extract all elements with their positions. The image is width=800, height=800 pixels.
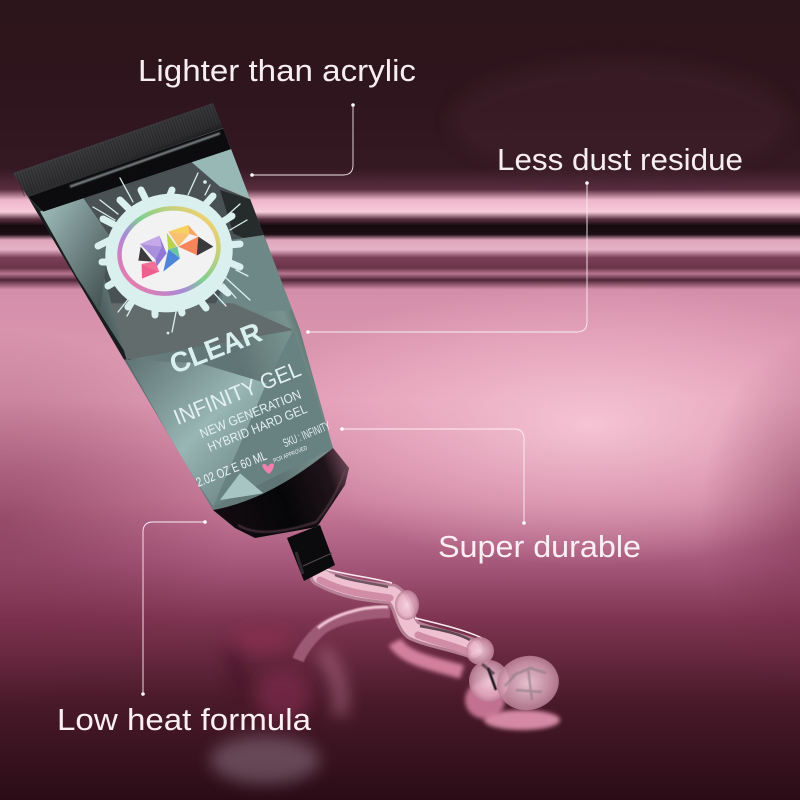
label: Less dust residue (306, 142, 743, 334)
tube cap (13, 103, 223, 197)
tube text: INFINITY GEL: INFINITY GEL (170, 356, 304, 430)
logo mark (138, 225, 213, 279)
tube black lower end (213, 448, 349, 538)
label: Lighter than acrylic: Lighter than acrylic (138, 53, 416, 88)
tube (13, 103, 360, 545)
gel strand and blob (320, 568, 564, 716)
label: Lighter than acrylic (138, 53, 416, 177)
label: Super durable: Super durable (438, 529, 641, 564)
logo ring (110, 197, 228, 305)
tube text: NEW GENERATION: NEW GENERATION (197, 387, 303, 441)
gel reflection (298, 607, 560, 730)
label: Low heat formula (57, 520, 312, 737)
tube text: SKU: SKU : INFINITY (281, 418, 332, 450)
tube text: approved: PCR APPROVED (273, 445, 309, 465)
tube nozzle (287, 525, 335, 581)
tube logo splash (92, 173, 250, 334)
label: Less dust residue: Less dust residue (497, 142, 743, 177)
label: Low heat formula: Low heat formula (57, 702, 312, 737)
icon: heart (262, 463, 274, 474)
tube body (28, 128, 349, 538)
tube text: volume: 2.02 OZ E 60 ML (194, 448, 269, 490)
label: Super durable (340, 427, 641, 564)
tube text: HYBRID HARD GEL: HYBRID HARD GEL (205, 401, 309, 455)
tube text: CLEAR: CLEAR (165, 316, 266, 380)
